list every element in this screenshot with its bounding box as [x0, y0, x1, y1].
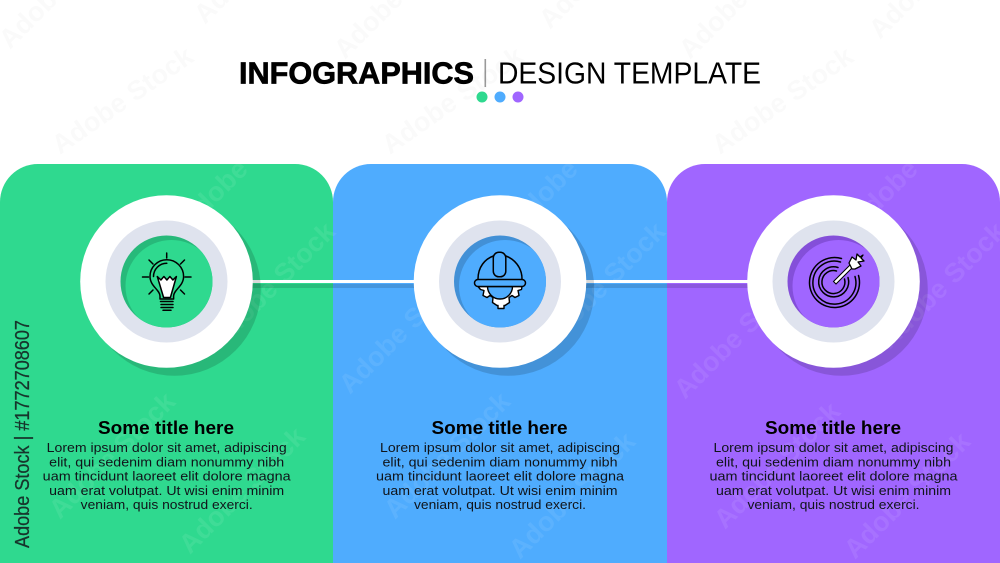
icon: hard hat with gear	[474, 252, 526, 308]
text: green column: uam tincidunt laoreet elit dolore magna	[43, 469, 292, 484]
watermark: Adobe Stock	[503, 426, 642, 563]
text: purple column: veniam, quis nostrud exerci.	[748, 497, 920, 512]
watermark: Adobe Stock	[503, 96, 642, 234]
text: purple column: uam tincidunt laoreet elit dolore magna	[710, 469, 958, 484]
watermark: Adobe Stock	[706, 40, 859, 160]
text: blue column: elit, qui sedenim diam nonummy nibh	[382, 454, 618, 469]
node: purple	[747, 195, 928, 376]
text: blue column: uam erat volutpat. Ut wisi enim minim	[382, 483, 618, 498]
text: purple column	[710, 418, 958, 512]
text: blue column: Some title here	[432, 418, 568, 438]
text: blue column: uam tincidunt laoreet elit dolore magna	[376, 469, 625, 484]
watermark: Adobe Stock	[668, 266, 807, 404]
text: purple column: uam erat volutpat. Ut wisi enim minim	[716, 483, 951, 498]
text: green column: veniam, quis nostrud exerci.	[81, 497, 253, 512]
text: green column: uam erat volutpat. Ut wisi enim minim	[49, 483, 284, 498]
watermark: Adobe Stock	[46, 40, 199, 160]
watermark: Adobe Stock	[838, 426, 977, 563]
watermark: Adobe Stock	[173, 421, 312, 559]
text: purple column: elit, qui sedenim diam nonummy nibh	[716, 454, 951, 469]
text: green column	[43, 418, 292, 512]
text: green column: Some title here	[98, 418, 234, 438]
node: blue	[414, 195, 594, 376]
text: green column: elit, qui sedenim diam nonummy nibh	[49, 454, 284, 469]
panel: green	[0, 164, 333, 563]
title dots	[476, 92, 524, 102]
connector line	[166, 280, 834, 283]
watermark: Adobe Stock	[378, 386, 517, 524]
watermark: Adobe Stock	[333, 261, 472, 399]
connector line shadow	[166, 284, 834, 288]
text: blue column: veniam, quis nostrud exerci.	[414, 497, 586, 512]
panel: purple	[667, 164, 1000, 563]
text: purple column: Lorem ipsum dolor sit amet, adipiscing	[714, 440, 954, 455]
panel: blue	[333, 164, 667, 563]
watermark: Adobe Stock	[843, 96, 982, 234]
text: purple column: Some title here	[765, 418, 901, 438]
watermark: Adobe Stock	[533, 216, 672, 354]
icon: target with arrow	[810, 254, 864, 308]
watermark: Adobe Stock	[376, 40, 529, 160]
title	[239, 56, 761, 90]
icon: light bulb	[142, 253, 191, 310]
title: INFOGRAPHICS	[239, 56, 474, 90]
watermark: Adobe Stock	[708, 396, 847, 534]
stock id vertical text: Adobe Stock | #1772708607	[12, 320, 34, 548]
watermark: Adobe Stock	[173, 96, 312, 234]
title: DESIGN TEMPLATE	[498, 56, 761, 90]
text: blue column	[376, 418, 625, 512]
node: green	[80, 195, 261, 376]
text: green column: Lorem ipsum dolor sit amet, adipiscing	[47, 440, 287, 455]
watermark: Adobe Stock	[203, 216, 342, 354]
watermark: Adobe Stock	[43, 386, 182, 524]
text: blue column: Lorem ipsum dolor sit amet, adipiscing	[380, 440, 620, 455]
